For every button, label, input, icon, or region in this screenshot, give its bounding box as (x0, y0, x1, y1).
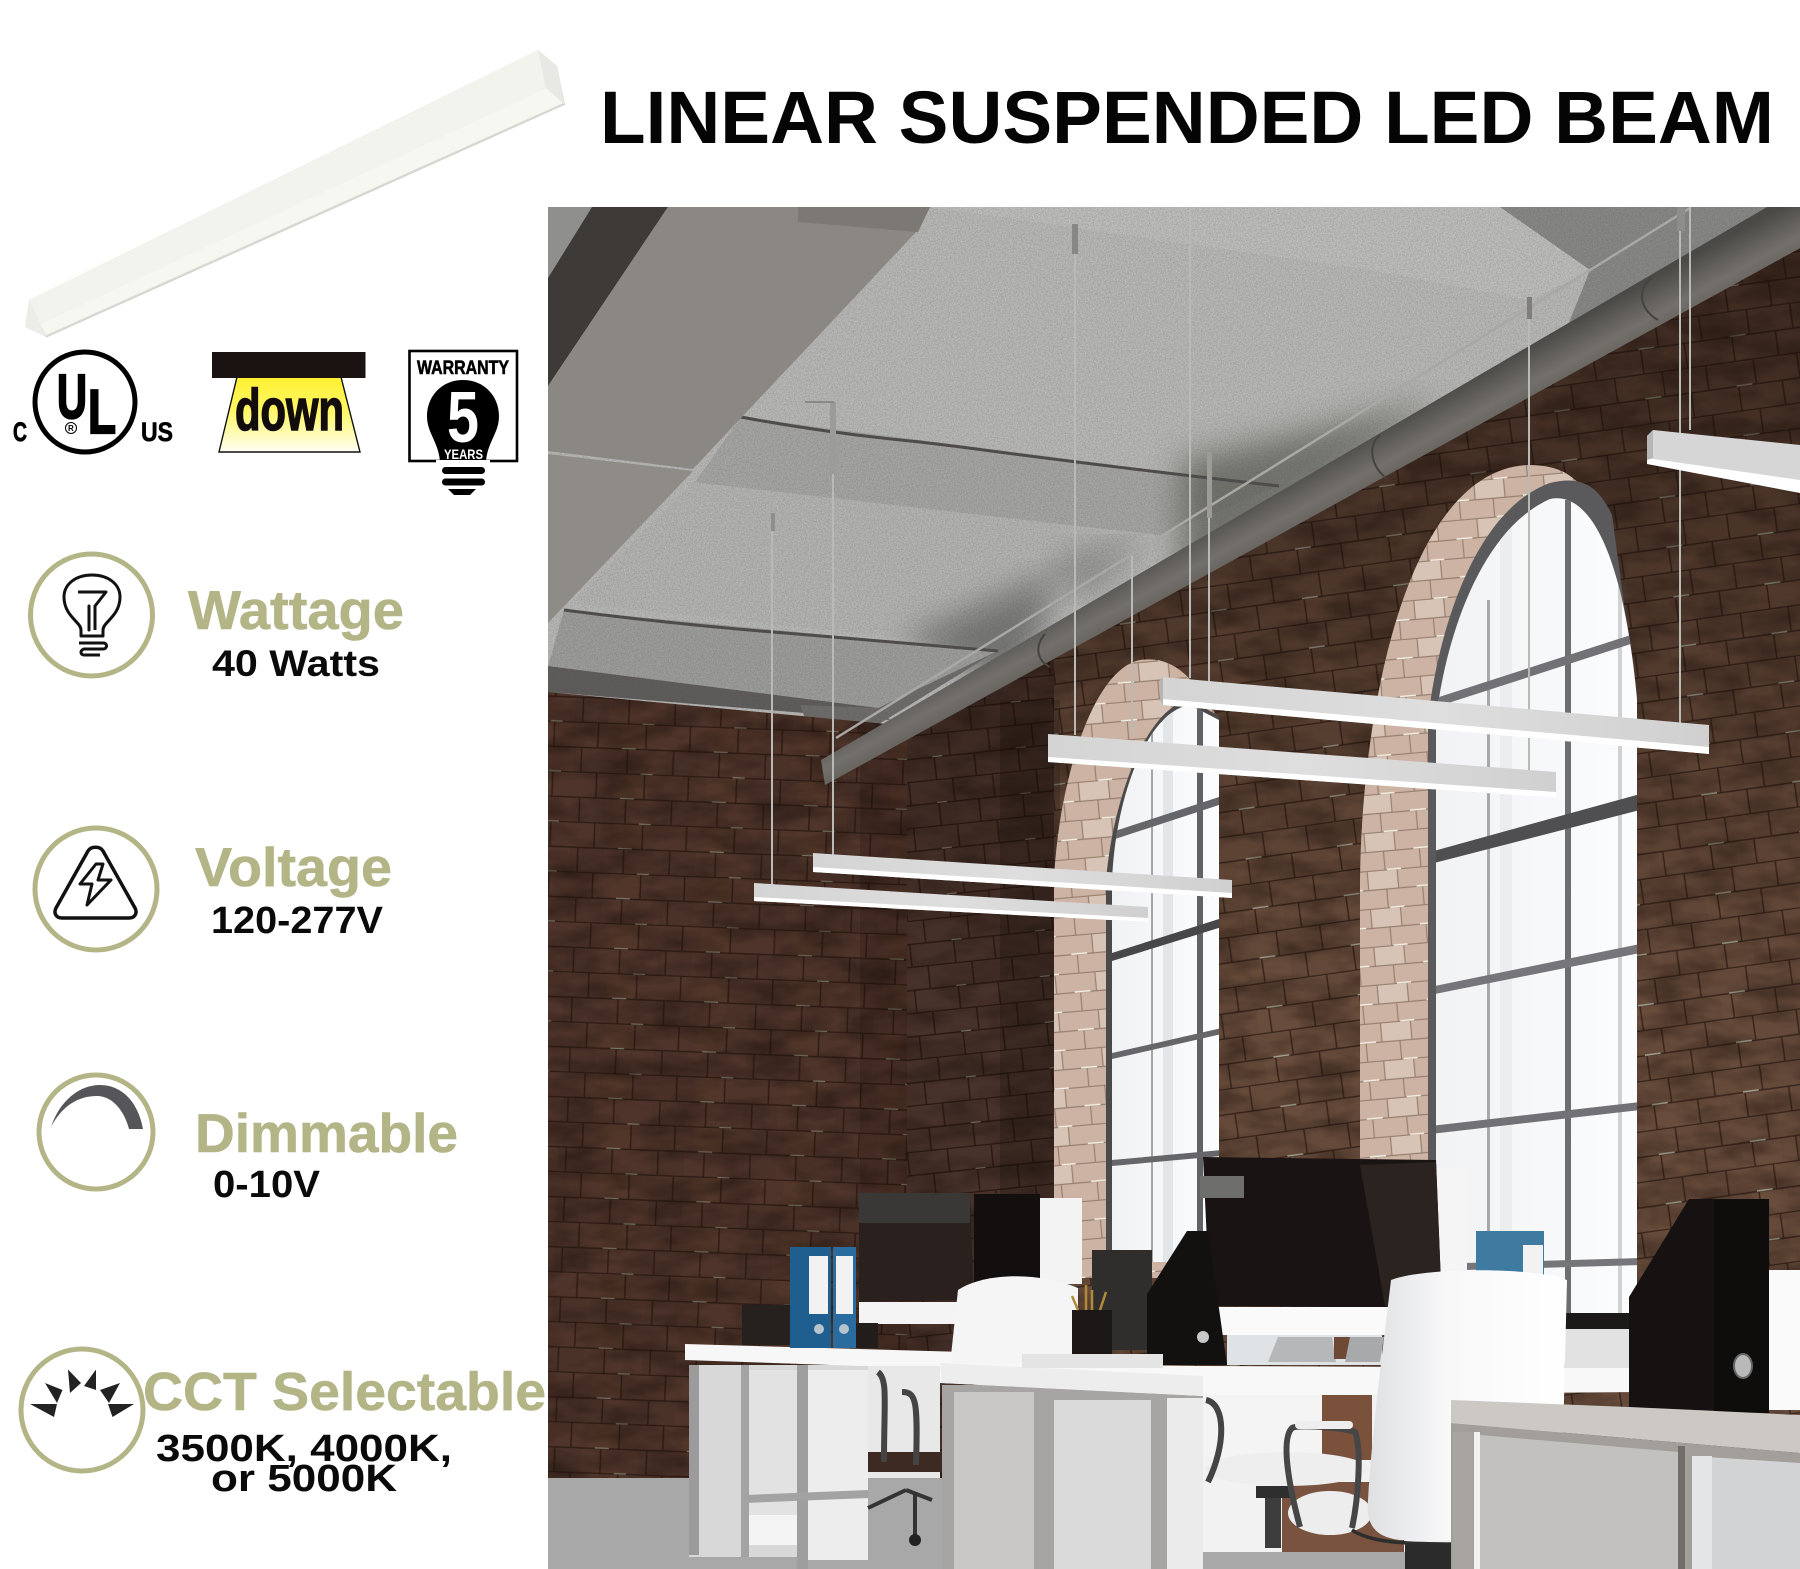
badge: 5 years warranty: WARRANTY (417, 358, 509, 379)
label: CCT Selectable (143, 1362, 546, 1422)
icon: downlight distribution: down (235, 378, 344, 443)
LED beam fixture: far right (1647, 430, 1800, 493)
product image: LED beam fixture (25, 50, 565, 337)
value: 0-10V (213, 1164, 321, 1206)
certification: cULus mark (13, 352, 173, 452)
certification: cULus mark: US (141, 417, 173, 447)
label: Wattage (188, 579, 404, 641)
duct pipe (821, 207, 1800, 785)
certification: cULus mark: C (13, 417, 27, 447)
black magazine file: front (1629, 1199, 1800, 1413)
LED beam fixture: back left (1048, 734, 1556, 798)
desk 3 with cabinet (1451, 1400, 1800, 1569)
left arched window (1054, 659, 1222, 1278)
feature: voltage (35, 828, 392, 950)
LED beam fixture: front right (813, 853, 1232, 898)
desk 2 with cabinet (940, 1363, 1640, 1569)
icon: sun rays (21, 1349, 143, 1471)
badge: 5 years warranty (410, 351, 517, 495)
suspension wires and conduit (771, 207, 1690, 885)
left brick wall (548, 690, 908, 1480)
icon: light bulb (30, 554, 152, 676)
badge: 5 years warranty: 5 (447, 378, 479, 458)
right brick wall (907, 240, 1800, 1500)
feature: wattage (30, 554, 404, 684)
value: 120-277V (211, 900, 384, 942)
right arched window (1360, 465, 1645, 1360)
LED beam fixture: front left (754, 883, 1148, 922)
back white chair (868, 1276, 1078, 1546)
ceiling beam: taupe panels (548, 207, 930, 623)
window lower dark strip (1565, 1313, 1639, 1368)
desk 1 with cabinet (685, 1344, 952, 1569)
badge: 5 years warranty: YEARS (444, 446, 483, 462)
feature: CCT selectable: or 5000K (211, 1458, 398, 1500)
monitors (859, 1157, 1467, 1365)
seat of centre chair (1204, 1395, 1368, 1548)
ceiling (548, 207, 1800, 767)
title: LINEAR SUSPENDED LED BEAM (600, 76, 1774, 159)
front white chair (1287, 1270, 1567, 1569)
office photo scene (548, 207, 1800, 1569)
blue binders (742, 1247, 878, 1348)
label: Dimmable (195, 1102, 458, 1164)
LED beam fixture: back right (1160, 677, 1709, 754)
icon: dimmer arc (39, 1075, 153, 1189)
values: 3500K, 4000K, (156, 1428, 452, 1470)
certification: cULus mark: U (57, 363, 87, 432)
value: 40 Watts (212, 643, 380, 684)
certification: cULus mark: L (88, 378, 116, 447)
magazine file and pencil holder (1022, 1231, 1227, 1368)
icon: downlight distribution (212, 352, 366, 452)
certification: cULus mark: R (68, 424, 74, 433)
feature: CCT selectable (21, 1349, 546, 1500)
blue box file (1476, 1231, 1544, 1278)
floor (548, 1478, 942, 1569)
icon: high voltage triangle (35, 828, 157, 950)
feature: dimmable (39, 1075, 458, 1206)
label: Voltage (195, 836, 392, 898)
